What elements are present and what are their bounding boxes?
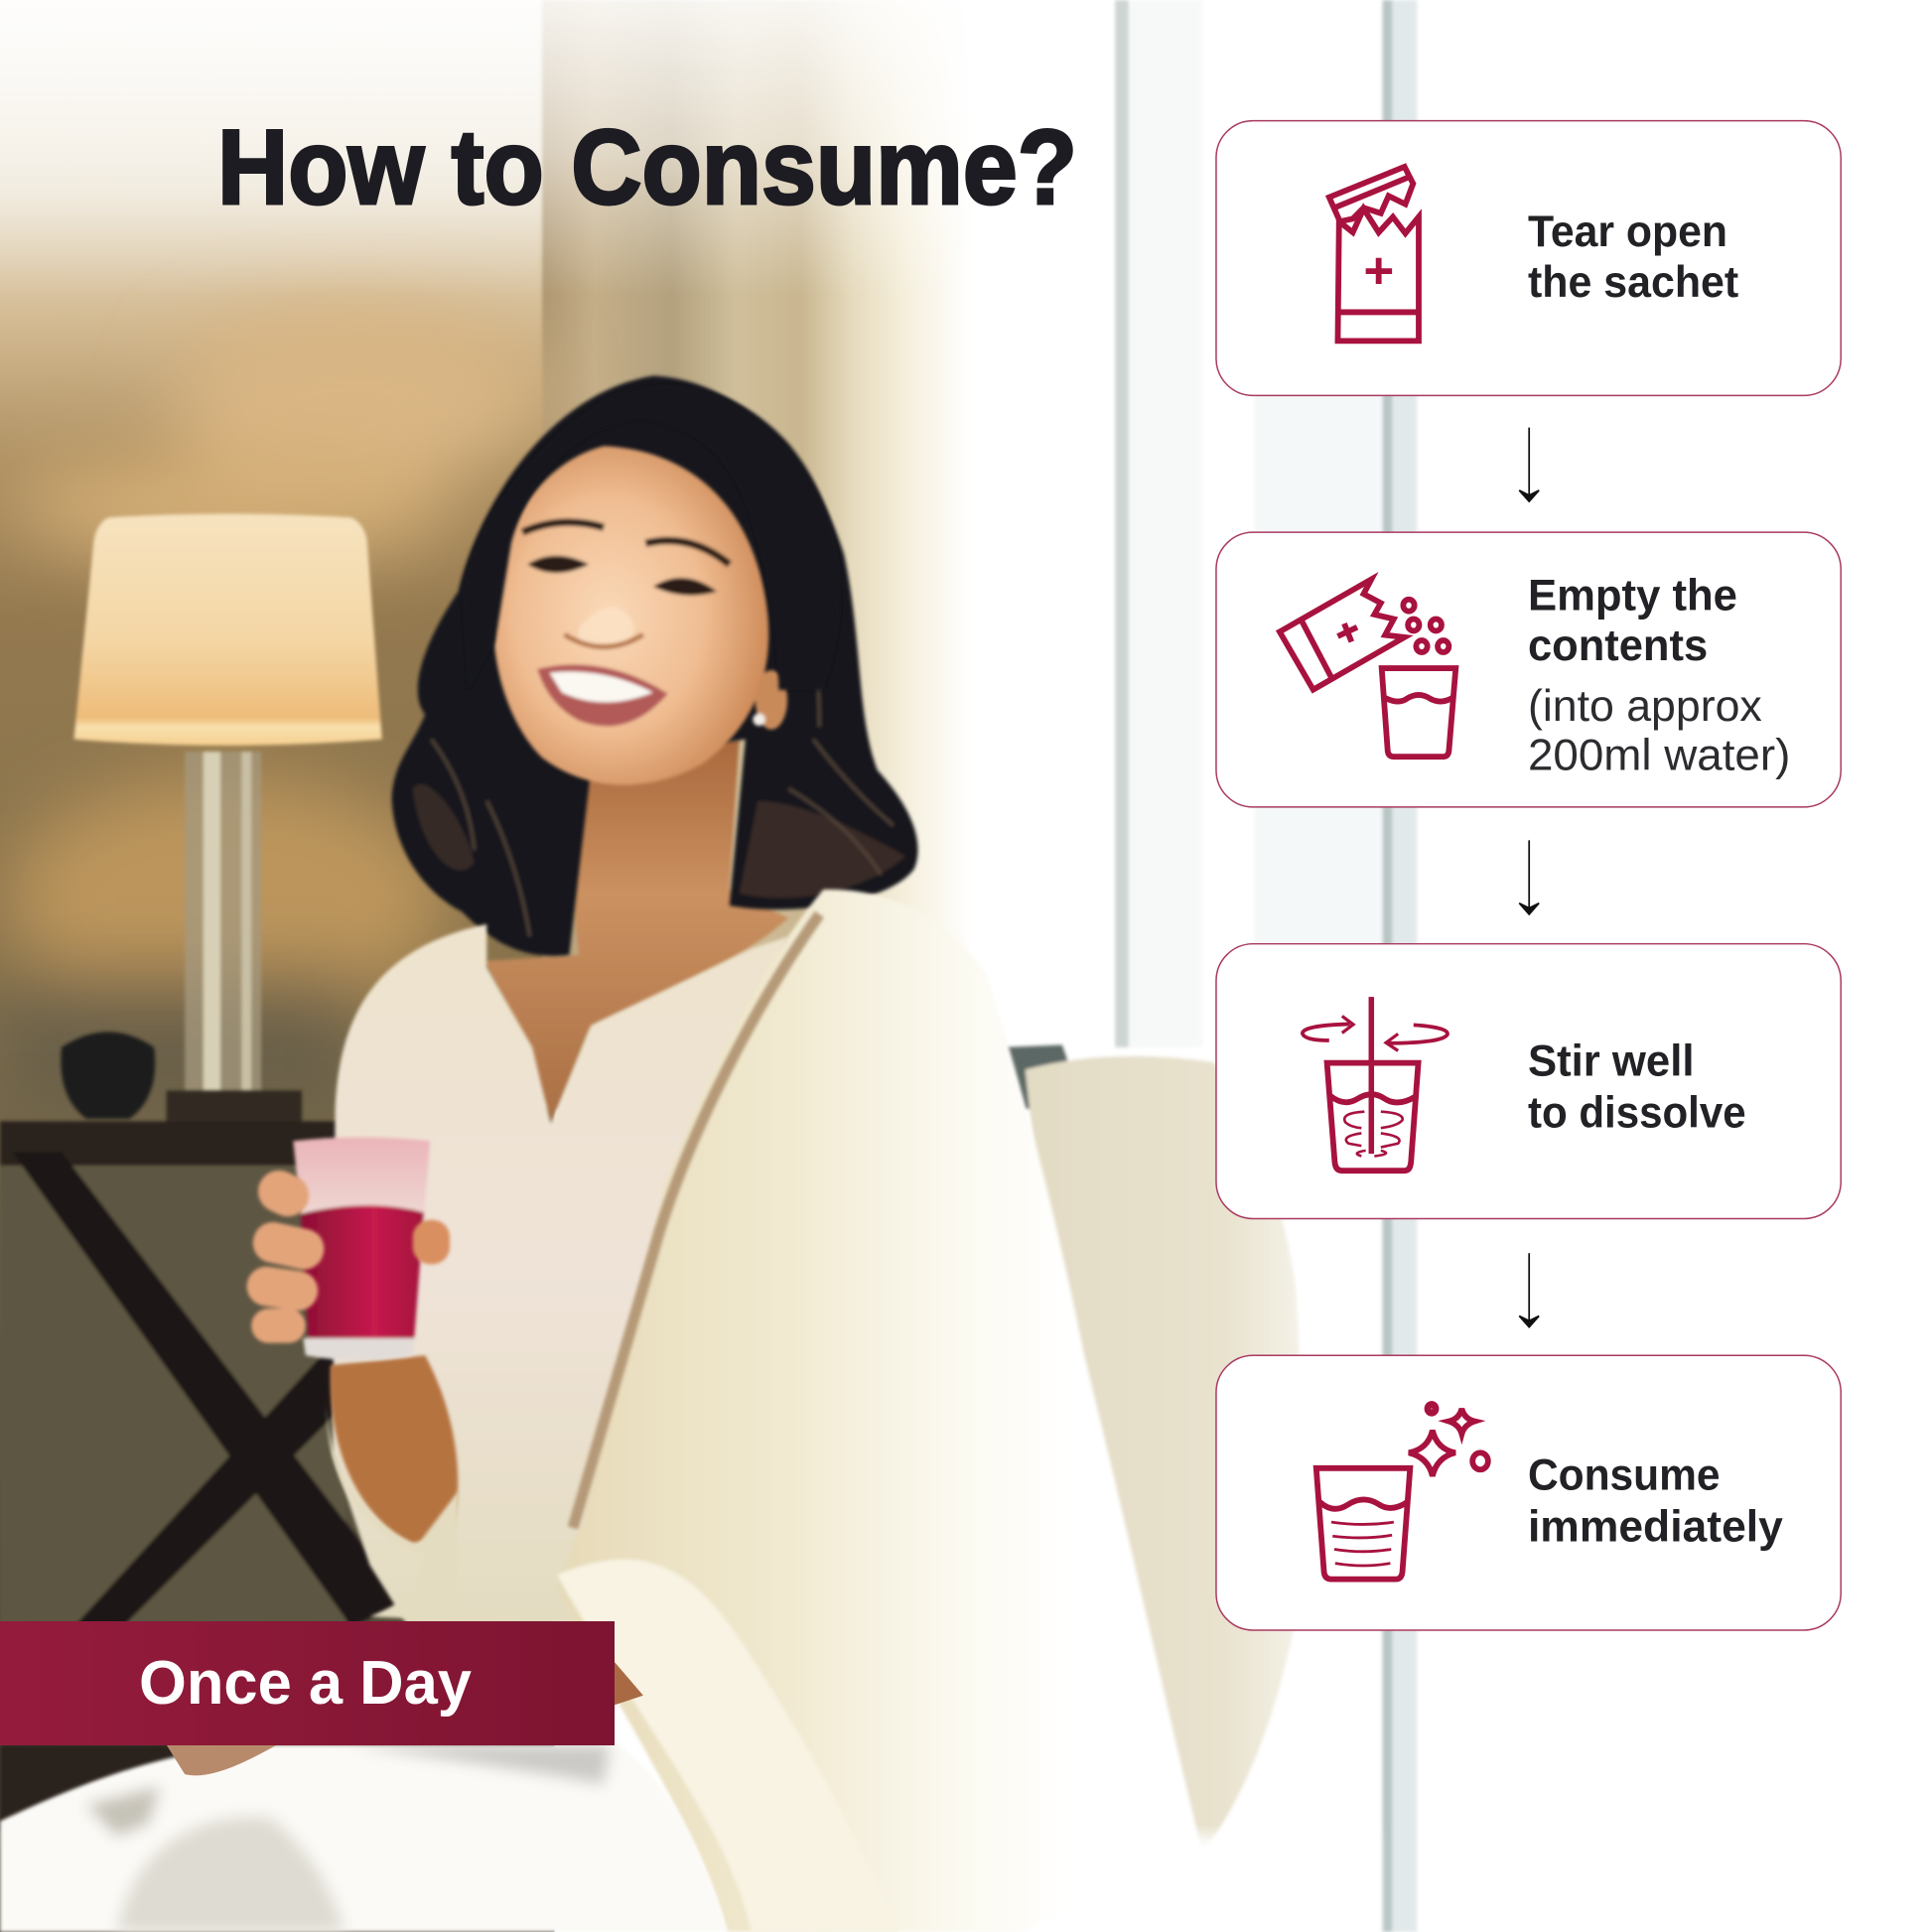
eyes (527, 556, 589, 573)
lower garment (0, 1744, 727, 1932)
eyebrows (522, 522, 604, 532)
sleeve (327, 1392, 459, 1620)
face (493, 446, 787, 785)
card 2 text: 200ml water) (1528, 732, 1790, 780)
lap shadows (86, 1744, 610, 1932)
card 3 text (1528, 1036, 1746, 1138)
banner text: Once a Day (139, 1649, 473, 1718)
arrow 2 (1519, 840, 1539, 914)
icon: stirring glass (1303, 997, 1448, 1171)
wall glow (0, 308, 542, 1121)
hair (392, 376, 918, 956)
title: How to Consume? (217, 107, 1077, 226)
neck and chest (484, 740, 788, 1124)
shawl fold (557, 1560, 899, 1932)
right hand at lap (614, 1661, 643, 1706)
banner: Once a Day (0, 1621, 615, 1745)
white fade lower right (1109, 1836, 1374, 1932)
arrow 1 (1519, 428, 1539, 501)
card 4 text: Consume (1528, 1450, 1721, 1499)
card 4 text (1528, 1450, 1783, 1552)
glass base (303, 1338, 415, 1360)
card 1 text: Tear open (1528, 207, 1727, 256)
juice (301, 1205, 424, 1340)
shirt (333, 924, 788, 1624)
card 2 text: Empty the (1528, 571, 1737, 620)
woman (0, 376, 1201, 1932)
arrow 3 (1519, 1253, 1539, 1327)
card 2 text: (into approx (1528, 682, 1762, 731)
lips (537, 664, 668, 726)
glass top (293, 1138, 430, 1226)
card 1 text (1528, 207, 1738, 307)
side table with vase (0, 1032, 407, 1831)
icon: torn sachet (1329, 167, 1419, 341)
shawl (557, 890, 1201, 1932)
hand fingers (244, 1164, 450, 1343)
knee hand (167, 1744, 277, 1775)
nose (578, 607, 633, 643)
hair front (462, 385, 840, 690)
card 2 text: contents (1528, 621, 1708, 670)
table lamp (73, 514, 382, 1109)
top light fade (0, 0, 986, 296)
icon: emptying sachet into glass (1280, 580, 1455, 757)
icon: glass with sparkles (1316, 1405, 1488, 1580)
card 2: empty contents (1216, 532, 1841, 807)
card 3 text: Stir well (1528, 1036, 1695, 1085)
card 4: consume (1216, 1355, 1841, 1630)
window frames (1115, 0, 1417, 1932)
room wall (0, 0, 554, 1932)
card 1 text: the sachet (1528, 258, 1738, 307)
card 3: stir (1216, 944, 1841, 1218)
teeth (550, 671, 653, 702)
curtain (542, 0, 973, 1109)
armchair (1004, 1044, 1309, 1855)
card 4 text: immediately (1528, 1503, 1783, 1552)
shawl border stripe (573, 914, 819, 1528)
ear with earring (756, 670, 787, 730)
forearm (330, 1355, 458, 1543)
card 1: tear open (1216, 121, 1841, 395)
card 3 text: to dissolve (1528, 1089, 1746, 1138)
glass with beet drink (293, 1138, 430, 1360)
card 2 text (1528, 571, 1790, 780)
